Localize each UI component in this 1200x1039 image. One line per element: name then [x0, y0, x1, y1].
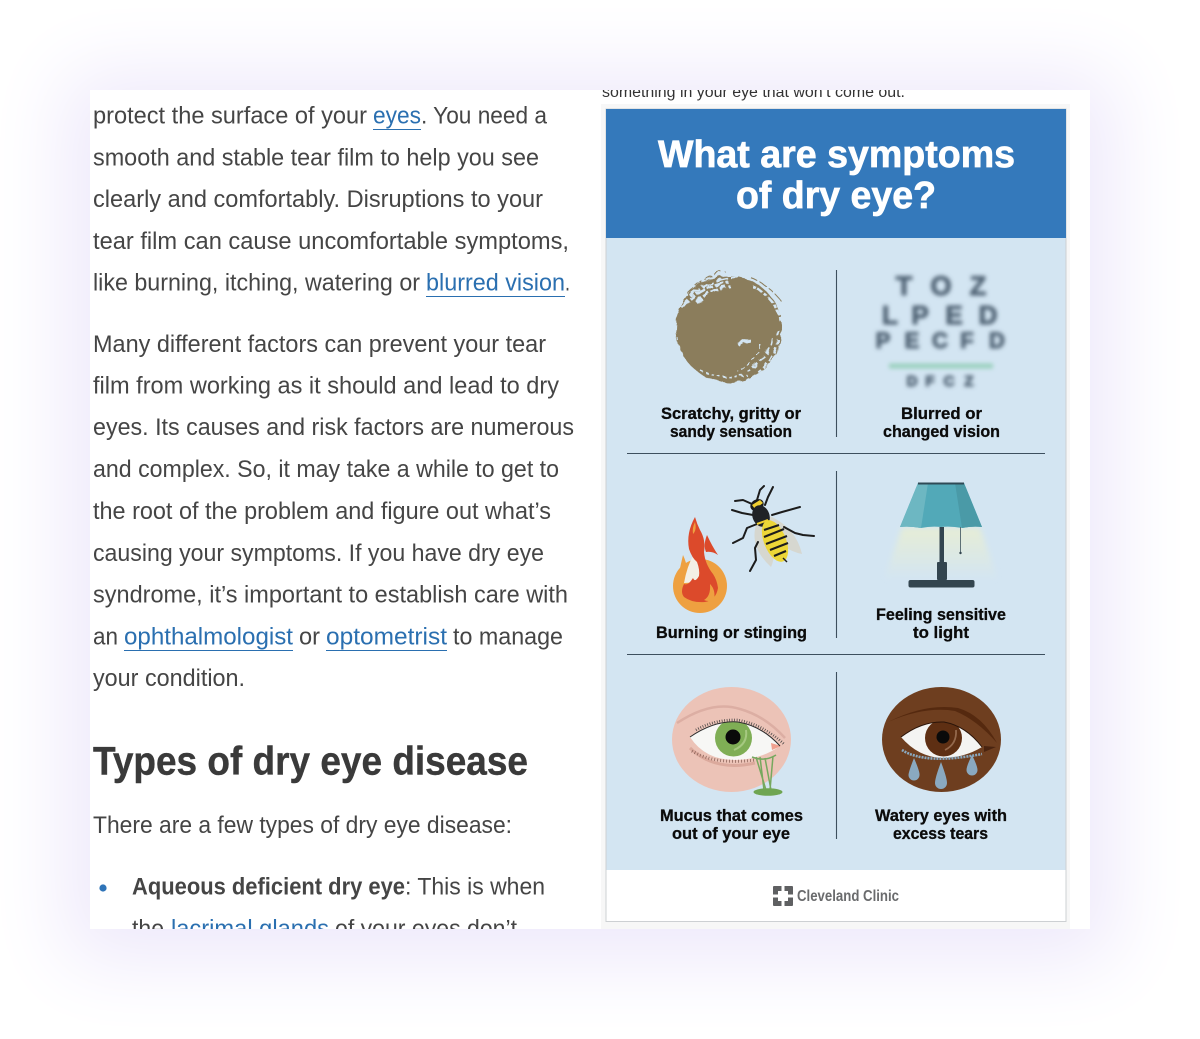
bullet: aqueous deficient	[99, 877, 544, 929]
paragraph: causes: your condition.	[93, 665, 245, 692]
icon: logo cross	[773, 886, 793, 906]
paragraph: tear film: tear film can cause uncomfortable symptoms,	[93, 228, 569, 255]
label: Feeling sensitive	[876, 606, 1006, 624]
icon: blurred eye chart: Z	[970, 271, 986, 301]
header band	[606, 109, 1066, 238]
icon: flame	[673, 517, 727, 613]
icon: blurred eye chart	[876, 271, 1005, 390]
paragraph: causes: an	[93, 624, 118, 650]
icon: blurred eye chart: Z	[964, 373, 974, 390]
icon: gritty smear	[676, 272, 782, 382]
cell: scratchy sensation	[661, 272, 802, 441]
icon: blurred eye chart: F	[960, 328, 974, 353]
icon: blurred eye chart: F	[925, 373, 935, 390]
bullet: aqueous deficient: lacrimal glands	[171, 916, 329, 942]
bullet: aqueous deficient: of your eyes don’t	[335, 916, 517, 942]
figure: dry eye symptoms infographic	[601, 104, 1070, 929]
icon: blurred eye chart: E	[945, 300, 963, 330]
label: to light	[913, 624, 970, 642]
bullet: aqueous deficient: : This is when	[405, 874, 545, 900]
bullet: aqueous deficient: the	[132, 916, 164, 942]
paragraph: tear film	[93, 102, 570, 296]
cell: light sensitivity	[876, 482, 1006, 642]
label	[660, 807, 803, 843]
paragraph: tear film: clearly and comfortably. Disruptions to your	[93, 186, 543, 213]
paragraph: causes: Many different factors can prevent your tear	[93, 331, 546, 358]
label	[883, 405, 1000, 441]
label: changed vision	[883, 423, 1000, 441]
icon: wasp	[732, 486, 814, 571]
icon: blurred eye chart: E	[905, 328, 919, 353]
paragraph: causes: or	[299, 624, 320, 650]
label: out of your eye	[672, 825, 790, 843]
label: Burning or stinging	[656, 624, 807, 642]
cell: burning or stinging	[656, 486, 814, 642]
title: What are symptoms	[658, 134, 1015, 176]
icon: blurred eye chart: T	[896, 271, 913, 301]
icon: blurred eye chart: L	[882, 300, 898, 330]
logo text: Cleveland Clinic	[797, 888, 899, 905]
paragraph: causes: syndrome, it’s important to establish care with	[93, 582, 568, 608]
paragraph: causes: optometrist	[326, 624, 447, 650]
paragraph: tear film: smooth and stable tear film to help you see	[93, 144, 539, 172]
intro line: There are a few types of dry eye disease:	[93, 812, 512, 839]
label	[661, 405, 802, 441]
label	[876, 606, 1006, 642]
label: Blurred or	[901, 405, 983, 423]
icon: eye with tears	[882, 687, 1001, 792]
icon: blurred eye chart: C	[932, 328, 948, 353]
label	[875, 807, 1007, 843]
clipped caption above figure: something in your eye that won’t come out.	[602, 84, 905, 101]
symptoms panel background	[606, 238, 1066, 870]
paragraph: causes: eyes. Its causes and risk factors are numerous	[93, 414, 574, 441]
cell: watery eyes	[875, 687, 1007, 843]
cell: mucus	[660, 687, 803, 843]
paragraph: tear film: protect the surface of your	[93, 102, 367, 130]
icon: blurred eye chart: P	[876, 328, 890, 353]
icon: blurred eye chart: C	[944, 373, 955, 390]
paragraph: tear film: . You need a	[421, 102, 548, 130]
paragraph: tear film: .	[565, 270, 570, 296]
footer: Cleveland Clinic logo	[773, 886, 899, 906]
paragraph: causes	[93, 331, 574, 692]
label: Watery eyes with	[875, 807, 1007, 825]
heading: types of dry eye disease: Types of dry eye disease	[93, 740, 528, 784]
icon: blurred eye chart: D	[907, 373, 918, 390]
paragraph: tear film: like burning, itching, watering or	[93, 270, 420, 296]
paragraph: causes: to manage	[453, 624, 563, 650]
label: excess tears	[893, 825, 988, 843]
paragraph: causes: causing your symptoms. If you have dry eye	[93, 540, 544, 567]
icon: table lamp	[884, 482, 998, 588]
title	[658, 134, 1015, 217]
paragraph: causes: film from working as it should and lead to dry	[93, 372, 559, 400]
title: of dry eye?	[736, 175, 936, 217]
bullet: aqueous deficient: Aqueous deficient dry eye	[132, 874, 405, 900]
icon: blurred eye chart: D	[979, 300, 997, 330]
icon: blurred eye chart: O	[930, 271, 952, 301]
icon: blurred eye chart: D	[989, 328, 1005, 353]
icon: blurred eye chart: P	[911, 300, 929, 330]
paragraph: causes: the root of the problem and figure out what’s	[93, 498, 551, 525]
paragraph: causes: ophthalmologist	[124, 624, 293, 650]
paragraph: causes: and complex. So, it may take a while to get to	[93, 456, 559, 483]
label: Scratchy, gritty or	[661, 405, 802, 423]
text column: article body	[93, 84, 905, 942]
dividers	[627, 270, 1045, 839]
panel: article page	[90, 90, 1090, 929]
paragraph: tear film: blurred vision	[426, 270, 565, 296]
icon: eye with mucus	[672, 687, 791, 796]
label: Mucus that comes	[660, 807, 803, 825]
label: sandy sensation	[670, 423, 792, 441]
paragraph: tear film: eyes	[373, 102, 421, 130]
cell: blurred vision	[876, 271, 1005, 441]
